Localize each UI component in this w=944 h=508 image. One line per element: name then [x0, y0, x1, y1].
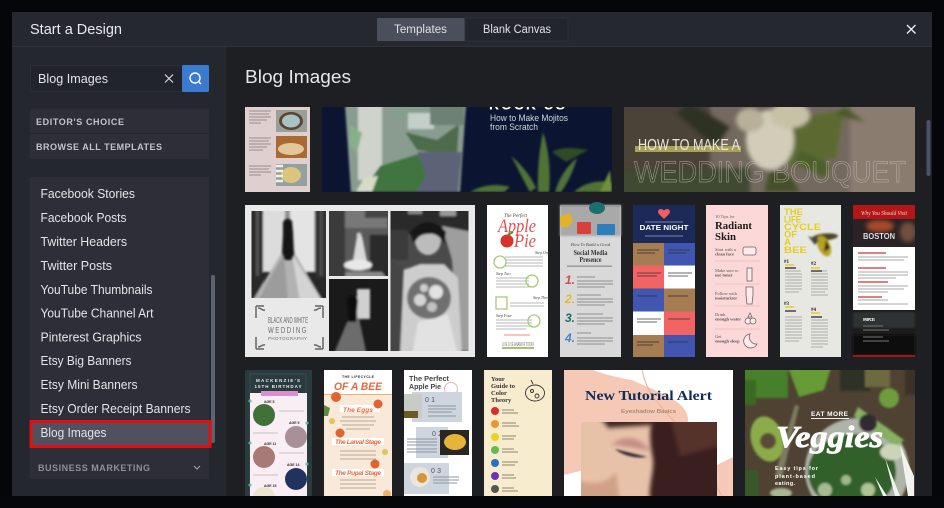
blog text: from Scratch: [490, 122, 538, 132]
template: lifecycle of a bee (orange): The Larval Stage: [335, 439, 381, 446]
veggies title: Easy tips for: [775, 466, 819, 472]
collage caption: [268, 316, 308, 341]
template: radiant skin: Drink: [715, 312, 726, 317]
template: life cycle of a bee: #4: [811, 308, 816, 313]
template: apple pie steps: Step Two: [496, 271, 510, 276]
template: radiant skin: enough water: [715, 316, 741, 322]
tab: templates: [377, 18, 465, 41]
category menu: Twitter Posts: [40, 259, 112, 273]
template: veggies: [745, 370, 915, 496]
template: recipe steps: [245, 107, 310, 192]
template: the perfect apple pie: Apple Pie: [409, 384, 441, 391]
template: social media presence: [560, 202, 621, 357]
icon: bee: [808, 232, 838, 259]
blog text: ROCK US: [489, 96, 565, 112]
template: the perfect apple pie: [404, 370, 472, 496]
veggies title: [775, 411, 883, 487]
template: new tutorial alert: [564, 370, 733, 500]
veggies title: Veggies: [776, 419, 883, 454]
category menu: Etsy Big Banners: [40, 354, 132, 368]
template: birthday timeline: MACKENZIE'S: [256, 378, 300, 383]
title: Start a Design: [30, 21, 122, 38]
template: radiant skin: Get: [715, 334, 722, 339]
template: boston: Why You Should Visit: [861, 211, 907, 217]
template: birthday timeline: AGE 11: [264, 442, 276, 446]
template: apple pie steps: Step One: [535, 250, 550, 255]
template: birthday timeline: AGE 14: [287, 463, 300, 467]
veggies title: eating.: [775, 481, 795, 487]
template: birthday timeline: AGE 5: [264, 400, 275, 404]
template: guide to color theory: Theory: [491, 397, 512, 404]
button: browse all templates: [30, 134, 209, 159]
template: date night: [633, 205, 695, 357]
section: business marketing: [38, 463, 200, 473]
template: birthday timeline: 15TH BIRTHDAY: [254, 384, 302, 389]
template: radiant skin: Follow with: [715, 291, 738, 296]
template: lifecycle of a bee (orange): The Pupal Stage: [335, 470, 381, 477]
template: life cycle of a bee: A: [784, 237, 792, 247]
template: radiant skin: Make sure to: [715, 268, 739, 273]
template: life cycle of a bee: #1: [784, 260, 790, 265]
template: birthday timeline: AGE 15: [264, 484, 277, 488]
template: boston: [853, 205, 916, 357]
template: social media presence: How To Build a Good: [570, 242, 611, 247]
template: lifecycle of a bee (orange): OF A BEE: [334, 381, 383, 393]
template: radiant skin: Start with a: [715, 247, 736, 252]
template: social media presence: 1.: [565, 273, 575, 287]
banner title: [634, 137, 906, 189]
category menu: Facebook Posts: [40, 211, 126, 225]
template: apple pie steps: [487, 205, 550, 357]
template: black and white wedding collage: [245, 205, 475, 358]
template: boston: BOSTON: [863, 231, 895, 241]
modal header: [12, 12, 932, 47]
template: radiant skin: clean face: [715, 252, 734, 256]
template: life cycle of a bee: #3: [784, 302, 790, 307]
floral ornaments: [256, 306, 323, 349]
category menu: Pinterest Graphics: [40, 330, 142, 344]
category menu: Facebook Stories: [40, 187, 135, 201]
blog text: How to Make Mojitos: [490, 113, 568, 123]
template: apple pie steps: Step Four: [496, 313, 512, 318]
template: apple pie steps: LIVE LIVE ANAMITA TODAY: [502, 342, 534, 348]
button: editor's choice: EDITOR'S CHOICE: [36, 117, 124, 127]
template: mojito banner: [322, 107, 612, 192]
template: date night: DATE NIGHT: [640, 225, 689, 232]
button: browse all templates: BROWSE ALL TEMPLATES: [36, 142, 162, 152]
template: life cycle of a bee: THE: [784, 207, 803, 217]
photo: bride at window: [252, 211, 326, 298]
tab: blank canvas: Blank Canvas: [483, 24, 551, 36]
template: birthday timeline: [245, 370, 312, 508]
category menu: Etsy Order Receipt Banners: [40, 402, 190, 416]
template: social media presence: Social Media: [574, 249, 608, 257]
template: guide to color theory: Color: [491, 390, 507, 397]
banner title: HOW TO MAKE A: [638, 137, 740, 154]
template: birthday timeline: AGE 9: [289, 421, 300, 425]
template: radiant skin: 10 Tips for: [715, 214, 735, 219]
banner title: WEDDING BOUQUET: [634, 156, 906, 189]
veggies title: plant-based: [775, 474, 815, 480]
tab: blank canvas: [465, 18, 568, 41]
photo: dress on garden: [329, 211, 388, 276]
photo: silhouette by window: [329, 279, 388, 356]
main heading: Blog Images: [245, 67, 351, 87]
headline: New Tutorial Alert: [585, 388, 713, 403]
template: lifecycle of a bee (orange): THE LIFECYCLE: [342, 375, 375, 379]
template: guide to color theory: Your: [491, 376, 505, 383]
category menu: YouTube Channel Art: [40, 306, 154, 320]
template: life cycle of a bee: BEE: [784, 245, 807, 255]
template: lifecycle of a bee (orange): [324, 370, 392, 498]
template: social media presence: 2.: [564, 292, 575, 306]
template: the perfect apple pie: 01: [425, 397, 435, 404]
template: social media presence: Presence: [580, 256, 602, 264]
icon: close: [907, 25, 916, 34]
template: radiant skin: moisturizer: [715, 296, 737, 300]
template: guide to color theory: [484, 370, 552, 496]
template: social media presence: 4.: [564, 331, 575, 345]
main scrollbar: [926, 120, 930, 176]
bottom backdrop strip: [0, 496, 944, 508]
template: the perfect apple pie: 03: [431, 468, 441, 475]
headline: [585, 390, 712, 414]
search box: [30, 65, 209, 92]
headline: Eyeshadow Basics: [621, 409, 676, 415]
template: radiant skin: enough sleep: [715, 338, 740, 344]
template: life cycle of a bee: #2: [811, 262, 816, 267]
template: guide to color theory: Guide to: [491, 383, 515, 390]
template: the perfect apple pie: 02: [432, 431, 442, 438]
category menu: Twitter Headers: [40, 235, 127, 249]
template: life cycle of a bee: LIFE: [784, 214, 801, 224]
icon: apple: [500, 232, 514, 248]
template: social media presence: 3.: [565, 311, 575, 325]
collage caption: WEDDING: [268, 326, 308, 335]
template: apple pie steps: Pie: [513, 231, 536, 252]
collage caption: BLACK AND WHITE: [268, 316, 308, 325]
selected item: blog images: [31, 422, 210, 446]
template: radiant skin: [706, 205, 768, 357]
template: lifecycle of a bee (orange): The Eggs: [343, 407, 373, 414]
category menu: [30, 177, 215, 479]
icon: palette: [526, 380, 544, 401]
search box: Blog Images: [38, 72, 108, 86]
photo: bride with bouquet: [390, 211, 468, 351]
template: wedding bouquet banner: [624, 107, 915, 192]
veggies title: EAT MORE: [811, 411, 849, 418]
template: life cycle of a bee: CYCLE: [784, 222, 821, 232]
template: radiant skin: use toner: [715, 272, 733, 278]
template: boston: FAST FACTS: [863, 317, 875, 322]
template: life cycle of a bee: [780, 205, 841, 357]
collage caption: PHOTOGRAPHY: [268, 336, 308, 341]
tab: templates: Templates: [394, 24, 447, 36]
template: apple pie steps: Step Three: [533, 295, 550, 300]
photo: eye makeup: [581, 422, 717, 496]
category menu: YouTube Thumbnails: [40, 283, 152, 297]
template: radiant skin: Radiant: [715, 221, 753, 232]
button: editor's choice: [30, 109, 209, 133]
sidebar: [12, 47, 226, 496]
template: the perfect apple pie: The Perfect: [409, 376, 450, 383]
category menu: Etsy Mini Banners: [40, 378, 138, 392]
template: apple pie steps: The Perfect: [504, 214, 528, 219]
blog text: [490, 107, 568, 130]
template: apple pie steps: Apple: [496, 216, 536, 237]
template: life cycle of a bee: OF: [784, 230, 798, 240]
section: business marketing: BUSINESS MARKETING: [38, 463, 150, 473]
selected item: blog images: Blog Images: [40, 426, 106, 440]
template: radiant skin: Skin: [715, 232, 736, 243]
